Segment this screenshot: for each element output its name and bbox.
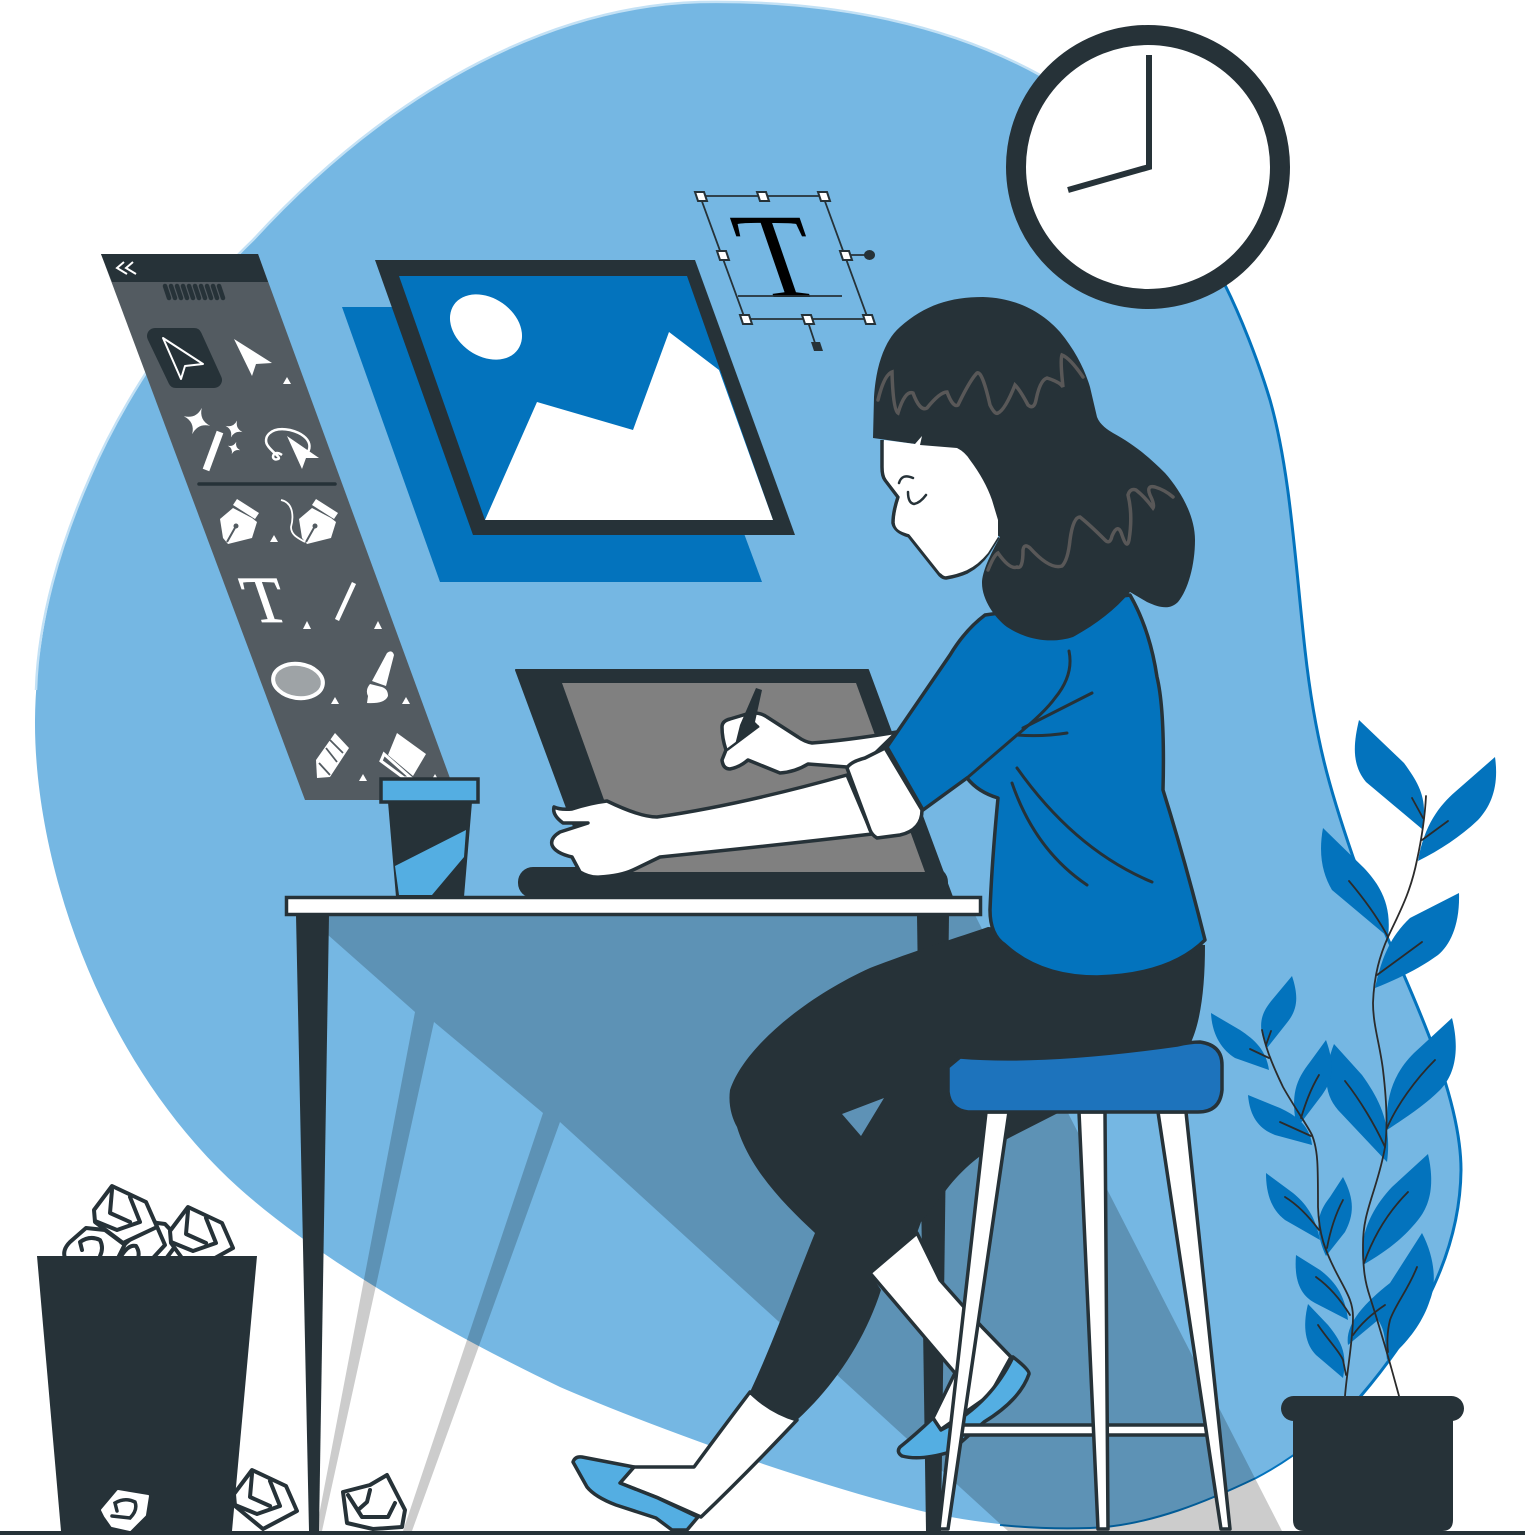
icon: pencil <box>316 733 349 778</box>
thigh gap <box>842 1098 884 1136</box>
tablet <box>516 670 952 898</box>
desk legs <box>296 915 949 1531</box>
pants <box>729 927 1205 1420</box>
icon: lasso <box>266 429 319 469</box>
panel divider <box>199 482 335 486</box>
wall clock <box>1016 35 1280 299</box>
stool seat <box>948 1042 1222 1112</box>
tool flyout markers <box>270 377 439 781</box>
collapse chevrons <box>117 262 136 274</box>
hair highlights <box>878 355 1173 570</box>
icon: ellipse tool <box>271 661 325 701</box>
back leg and foot <box>870 1233 1029 1458</box>
bin body <box>37 1256 257 1531</box>
plant pot <box>1281 1396 1464 1531</box>
icon: curvature pen tool <box>281 499 338 544</box>
icon: type tool: T <box>232 563 297 637</box>
drawing hand with stylus <box>722 688 897 773</box>
leaves <box>1211 720 1496 1378</box>
coffee cup <box>381 779 478 897</box>
selected tool background <box>155 336 214 380</box>
waste bin with paper <box>37 1186 257 1531</box>
stems and veins <box>1250 796 1448 1396</box>
front foot <box>573 1392 797 1530</box>
icon: brush <box>367 651 394 703</box>
text tool selection box: T <box>718 189 838 323</box>
floor line <box>0 1531 1525 1535</box>
plant <box>1211 720 1496 1531</box>
paper ball on floor right <box>343 1475 405 1529</box>
image frame with mountains <box>342 260 795 582</box>
face <box>882 436 998 578</box>
icon: selection arrow <box>163 338 203 379</box>
icon: line tool <box>337 583 354 620</box>
text tool selection box <box>695 189 875 351</box>
paper ball on floor left <box>234 1470 297 1529</box>
paper ball on bin <box>102 1491 148 1530</box>
stool <box>939 1042 1230 1529</box>
resting arm and cuff <box>552 748 922 877</box>
icon: eraser <box>381 733 426 778</box>
shirt <box>887 595 1205 977</box>
paper balls in bin <box>64 1186 233 1260</box>
tools panel <box>101 254 458 800</box>
icon: magic wand <box>179 403 246 470</box>
hair <box>873 297 1195 640</box>
woman <box>552 297 1230 1530</box>
icon: pen tool <box>220 499 259 544</box>
desk top <box>286 898 980 914</box>
icon: direct selection arrow <box>234 339 272 376</box>
desk shadow on wall and floor <box>316 915 1282 1531</box>
panel grip <box>165 286 223 298</box>
